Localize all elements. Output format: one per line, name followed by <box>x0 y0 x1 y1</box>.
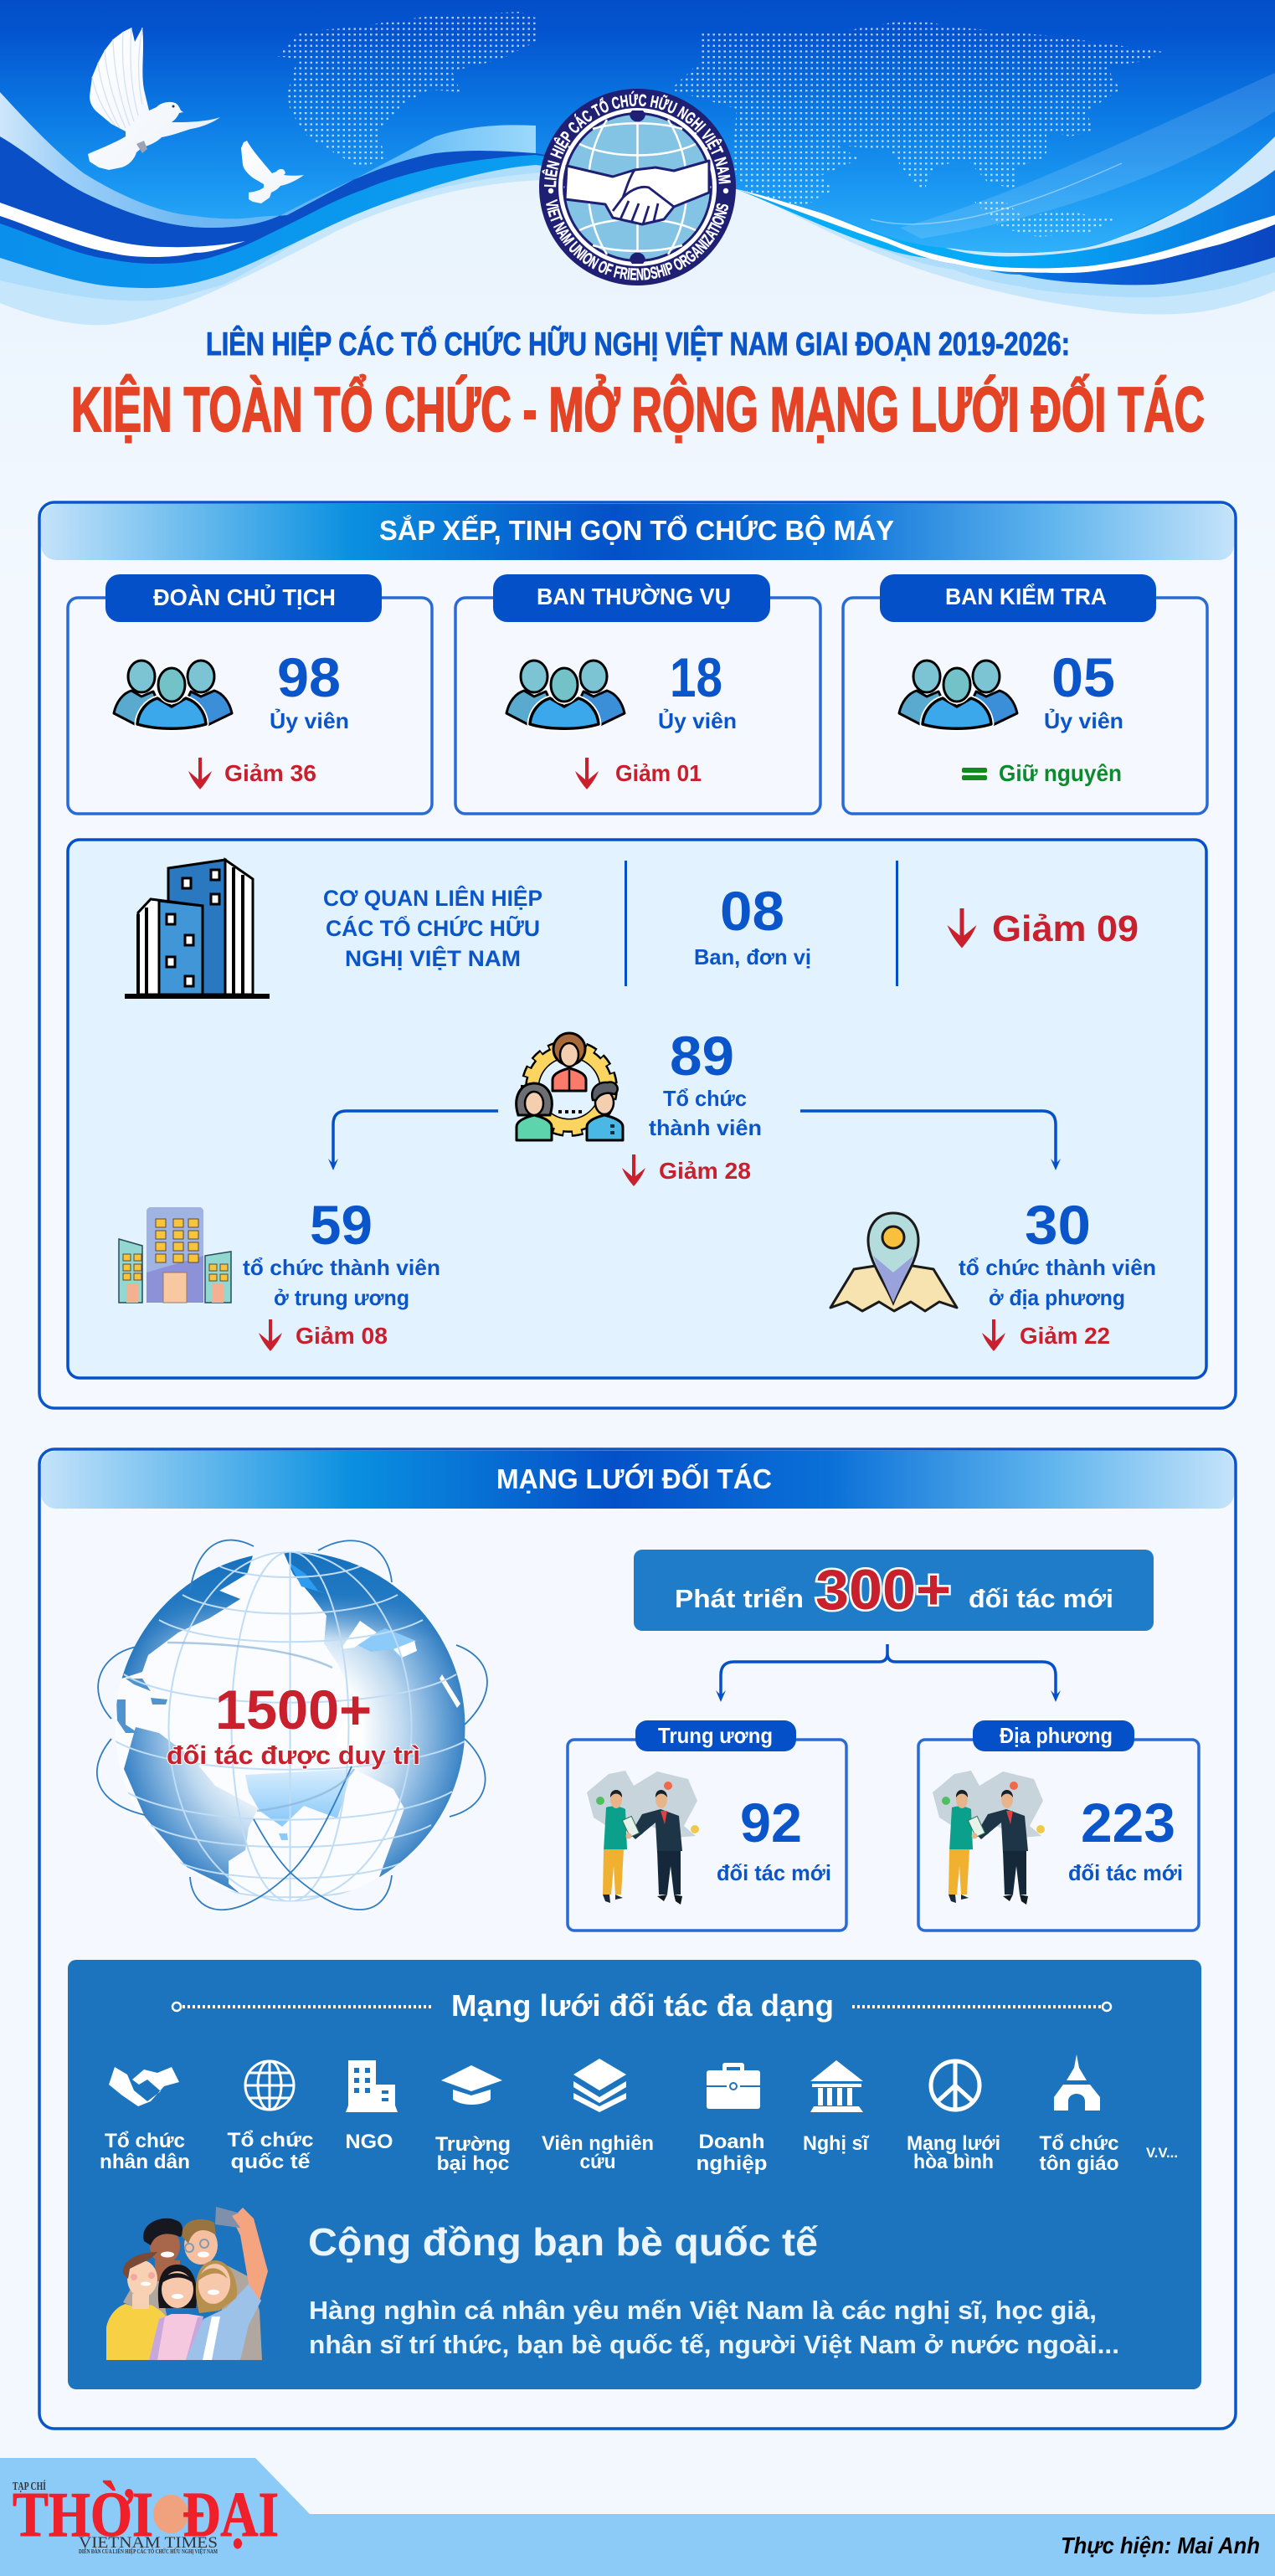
icon: colourful buildings <box>119 1207 231 1303</box>
icon labels: Tổ chức <box>228 2129 313 2152</box>
card: Ban Kiểm tra: 05 <box>1051 646 1115 708</box>
card: Đoàn Chủ tịch: Giảm 36 <box>224 760 316 786</box>
card: Ban Kiểm tra: Ủy viên <box>1044 707 1123 733</box>
stat: 59 central <box>243 1194 440 1351</box>
icon: briefcase <box>707 2063 760 2109</box>
globe: pale landmass <box>245 1769 352 1840</box>
card: local partners: Địa phương <box>1000 1723 1113 1748</box>
card: Ban Thường vụ: 18 <box>670 646 722 708</box>
subtitle: LIÊN HIỆP CÁC TỔ CHỨC HỮU NGHỊ VIỆT NAM GIAI ĐOẠN 2019-2026: <box>206 325 1070 362</box>
icon labels: NGO <box>345 2131 393 2153</box>
globe with 1500+ partners: đối tác được duy trì <box>167 1740 420 1770</box>
stat: 08 departments: Ban, đơn vị <box>694 944 811 969</box>
globe with 1500+ partners <box>97 1540 487 1910</box>
text: international friends community: Cộng đồng bạn bè quốc tế <box>308 2220 818 2264</box>
icon: church <box>1054 2054 1100 2111</box>
panel: organisational structure <box>39 502 1236 1408</box>
heading: diverse network: Mạng lưới đối tác đa dạng <box>451 1988 834 2023</box>
illustration: friends taking a selfie <box>106 2207 268 2360</box>
icon labels: Tổ chức <box>105 2130 185 2152</box>
card: Ban Kiểm tra: BAN KIỂM TRA <box>945 584 1107 609</box>
card: local partners: 223 <box>1081 1792 1175 1854</box>
arrow: branching bracket <box>716 1644 1061 1702</box>
stat: 89 members: Tổ chức <box>663 1086 747 1111</box>
card: central partners: 92 <box>740 1792 802 1854</box>
stat: 59 central: 59 <box>310 1194 373 1256</box>
logo: Thời Đại Vietnam Times: TẠP CHÍ <box>13 2479 46 2493</box>
card: central partners <box>568 1720 846 1931</box>
header banner with waves <box>0 0 1275 325</box>
card: Ban Thường vụ: BAN THƯỜNG VỤ <box>537 584 731 609</box>
icon: small white dove <box>241 141 304 203</box>
stat: 89 members: Giảm 28 <box>659 1158 751 1184</box>
agency name <box>323 885 542 971</box>
logo: Thời Đại Vietnam Times: THỜI <box>13 2480 153 2550</box>
icon: office building <box>346 2060 398 2112</box>
icon labels: Mạng lưới <box>907 2132 1000 2155</box>
stat: 59 central: Giảm 08 <box>296 1323 388 1349</box>
icon: office towers <box>125 860 270 999</box>
arrow: to central members <box>328 1111 498 1170</box>
credit: Thực hiện: Mai Anh <box>1061 2532 1260 2558</box>
card: Đoàn Chủ tịch: ĐOÀN CHỦ TỊCH <box>153 584 336 610</box>
icon: map pin <box>830 1213 957 1311</box>
card: Ban Kiểm tra <box>843 574 1207 814</box>
panel: agency and members <box>68 840 1206 1378</box>
agency name: CƠ QUAN LIÊN HIỆP <box>323 885 542 911</box>
footer band <box>0 2458 1275 2576</box>
globe: southern landmass <box>124 1727 258 1894</box>
callout: 300+ new partners: đối tác mới <box>969 1584 1113 1613</box>
card: central partners: Trung ương <box>658 1723 773 1748</box>
logo: Thời Đại Vietnam Times: VIETNAM TIMES <box>79 2534 218 2552</box>
icon labels: quốc tế <box>231 2151 311 2173</box>
card: Ban Thường vụ: Ủy viên <box>658 707 737 733</box>
callout: 300+ new partners <box>634 1550 1154 1631</box>
stat: 08 departments <box>694 880 811 969</box>
icon labels: cứu <box>579 2151 616 2173</box>
card: Đoàn Chủ tịch <box>68 574 432 814</box>
text: international friends community: Hàng nghìn cá nhân yêu mến Việt Nam là các nghị sĩ, học giả, <box>309 2296 1097 2325</box>
arrow: to local members <box>800 1111 1061 1170</box>
logo: Vietnam Union of Friendship Organizations <box>539 89 736 285</box>
stat: down 09: Giảm 09 <box>992 908 1139 949</box>
title block <box>71 325 1205 445</box>
heading: diverse network <box>172 1988 1111 2023</box>
globe with 1500+ partners: 1500+ <box>215 1679 372 1740</box>
icon labels: Doanh <box>698 2131 765 2153</box>
stat: 59 central: ở trung ương <box>274 1285 409 1310</box>
icon labels: Nghị sĩ <box>803 2132 869 2155</box>
card: local partners <box>918 1720 1199 1931</box>
icon labels: bại học <box>437 2152 509 2175</box>
icon labels: tôn giáo <box>1040 2152 1118 2175</box>
panel: partner network <box>39 1449 1236 2429</box>
stat: 30 local: 30 <box>1025 1194 1091 1256</box>
icon labels: Trường <box>435 2133 511 2156</box>
section header bar <box>41 504 1234 560</box>
globe: eastern landmass right <box>282 1549 477 1884</box>
stat: 89 members: 89 <box>670 1025 734 1087</box>
icon: pillared building <box>810 2060 863 2112</box>
card: Ban Thường vụ: Giảm 01 <box>615 760 702 786</box>
stat: 59 central: tổ chức thành viên <box>243 1255 440 1280</box>
section header bar: SẮP XẾP, TINH GỌN TỔ CHỨC BỘ MÁY <box>379 514 894 546</box>
callout: 300+ new partners: 300+ <box>815 1558 951 1622</box>
stat: 30 local: tổ chức thành viên <box>959 1255 1156 1280</box>
logo: Vietnam Union of Friendship Organizations: VIET NAM UNION OF FRIENDSHIP ORGANIZATIONS <box>546 199 728 280</box>
text: international friends community: nhân sĩ trí thức, bạn bè quốc tế, người Việt Nam ở nước ngoài... <box>309 2330 1119 2359</box>
stat: 89 members: thành viên <box>649 1115 762 1140</box>
panel: diverse partner network <box>68 1960 1201 2389</box>
stat: 89 members <box>622 1025 762 1186</box>
card: Đoàn Chủ tịch: 98 <box>277 646 341 708</box>
text: international friends community <box>308 2220 1119 2359</box>
section header bar <box>41 1451 1234 1509</box>
icon: graduation cap <box>441 2065 502 2105</box>
icon labels: hòa bình <box>913 2151 994 2173</box>
stat: 30 local <box>959 1194 1156 1351</box>
icon labels: nghiệp <box>697 2152 767 2175</box>
icon labels <box>100 2129 1178 2175</box>
logo: Thời Đại Vietnam Times: ĐẠI <box>183 2480 279 2550</box>
icon: large white dove <box>88 28 220 170</box>
section header bar: MẠNG LƯỚI ĐỐI TÁC <box>496 1463 772 1494</box>
card: local partners: đối tác mới <box>1068 1860 1183 1885</box>
icon: globe <box>245 2061 294 2110</box>
world map of dots <box>276 12 1164 237</box>
icon: peace sign <box>931 2061 979 2110</box>
card: Ban Thường vụ <box>455 574 820 814</box>
stat: 08 departments: 08 <box>720 880 784 942</box>
logo: Thời Đại Vietnam Times <box>13 2479 279 2555</box>
icon labels: nhân dân <box>100 2151 190 2173</box>
icon labels: V.V... <box>1146 2145 1178 2161</box>
stat: 30 local: Giảm 22 <box>1020 1323 1110 1349</box>
icon labels: Tổ chức <box>1040 2132 1118 2155</box>
icon: stacked books <box>573 2059 626 2112</box>
logo: Vietnam Union of Friendship Organizations: LIÊN HIỆP CÁC TỔ CHỨC HỮU NGHỊ VIỆT NAM <box>542 90 731 188</box>
icon labels: Viên nghiên <box>542 2132 654 2155</box>
icon: member organisations <box>517 1033 623 1140</box>
globe: northern landmass left <box>122 1555 253 1679</box>
agency name: NGHỊ VIỆT NAM <box>345 945 521 971</box>
card: Ban Kiểm tra: Giữ nguyên <box>999 760 1122 786</box>
card: central partners: đối tác mới <box>717 1860 831 1885</box>
stat: 30 local: ở địa phương <box>989 1285 1125 1310</box>
logo: Thời Đại Vietnam Times: DIỄN ĐÀN CỦA LIÊN HIỆP CÁC TỔ CHỨC HỮU NGHỊ VIỆT NAM <box>79 2548 218 2555</box>
agency name: CÁC TỔ CHỨC HỮU <box>326 915 540 941</box>
callout: 300+ new partners: Phát triển <box>675 1584 804 1613</box>
card: Đoàn Chủ tịch: Ủy viên <box>270 707 349 733</box>
icon: handshake <box>109 2067 179 2106</box>
